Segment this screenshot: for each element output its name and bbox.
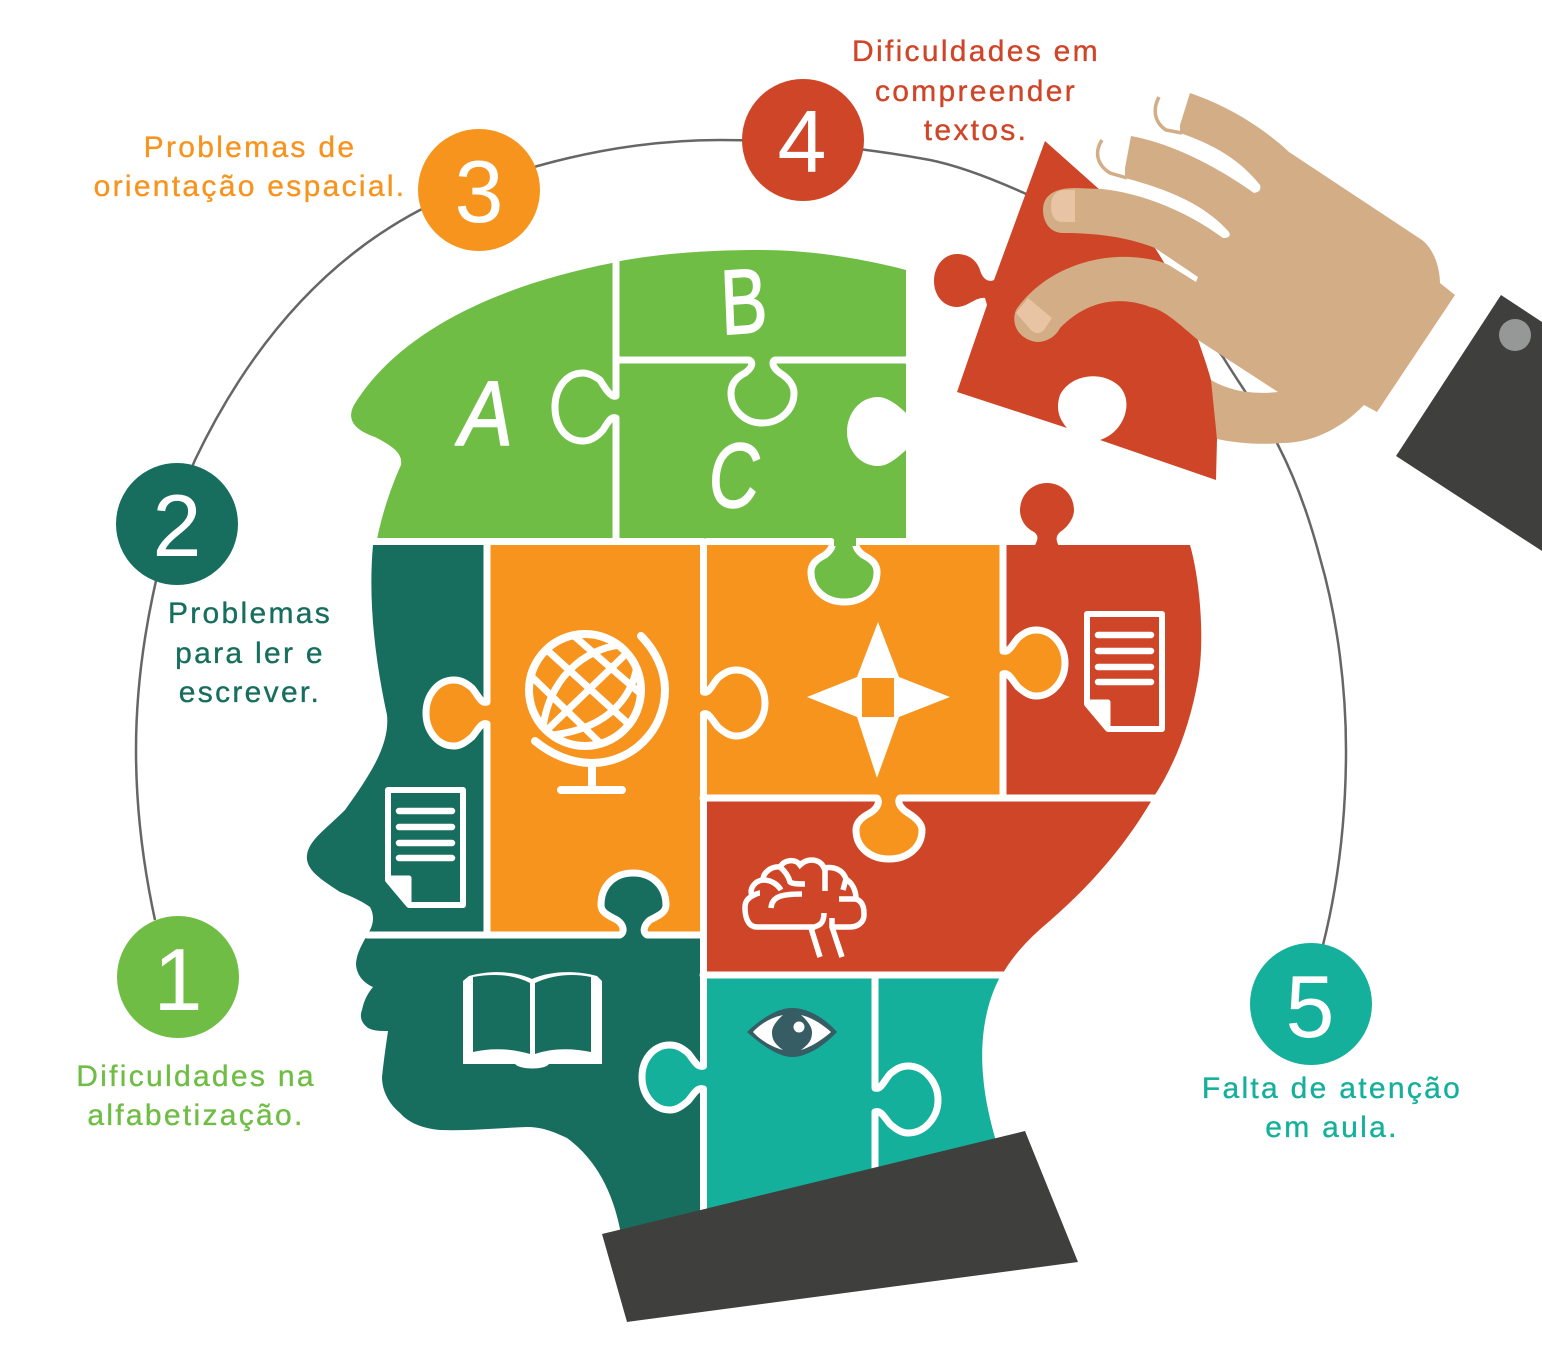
icon: globe [529, 634, 665, 790]
icon: open book [463, 972, 602, 1068]
icon: document dark teal [388, 790, 463, 905]
connecting arc [136, 140, 1346, 945]
label 4: compreender [875, 75, 1077, 108]
step 4 badge: 4 [778, 92, 826, 191]
fingernail outlines [1098, 97, 1182, 178]
step 2 badge: 2 [153, 476, 201, 575]
label 4: textos. [924, 114, 1028, 147]
piece: red lower [703, 798, 1153, 975]
label 3: orientação espacial. [94, 170, 406, 203]
step 1 badge: 1 [154, 930, 202, 1029]
icon: compass star [807, 622, 950, 778]
shirt cuff with button [1396, 295, 1542, 551]
puzzle head [307, 249, 1201, 1240]
step 1 badge [117, 916, 239, 1038]
label 5: Falta de atenção [1202, 1072, 1462, 1105]
piece: dark teal lower face [356, 935, 705, 1240]
letter C: C [709, 425, 760, 527]
label 2: Problemas [168, 597, 332, 630]
letter B: B [718, 249, 769, 355]
piece: dark teal upper face [307, 545, 490, 935]
piece outlines and knobs [367, 536, 1190, 1215]
step 4 badge [742, 79, 864, 201]
label 5 [1202, 1072, 1462, 1144]
step 2 badge [116, 463, 238, 585]
label 3: Problemas de [144, 131, 356, 164]
label 4 [852, 35, 1100, 147]
label 4: Dificuldades em [852, 35, 1100, 68]
label 3 [94, 131, 406, 203]
icon: document red [1087, 614, 1162, 729]
icon: brain [745, 860, 864, 957]
label 2: escrever. [179, 676, 321, 709]
piece: green top [351, 249, 906, 539]
icon: eye [747, 1008, 837, 1057]
piece: teal [703, 977, 1000, 1225]
label 1: alfabetização. [87, 1099, 305, 1132]
label 1 [76, 1060, 316, 1132]
step 3 badge [418, 129, 540, 251]
label 1: Dificuldades na [76, 1060, 316, 1093]
step 3 badge: 3 [455, 142, 503, 241]
label 2 [168, 597, 332, 709]
fingernail: thumb [1016, 298, 1052, 333]
piece: orange right [703, 545, 1003, 798]
knob: red top [1020, 483, 1074, 548]
label 5: em aula. [1265, 1111, 1399, 1144]
step 5 badge [1250, 943, 1372, 1065]
step 5 badge: 5 [1286, 957, 1334, 1056]
hand [1014, 93, 1455, 444]
loose red puzzle piece [934, 141, 1217, 480]
letter A: A [454, 363, 513, 465]
jacket sleeve [602, 1131, 1078, 1322]
piece: red upper right [1003, 545, 1201, 798]
label 2: para ler e [175, 637, 325, 670]
piece: orange left [487, 545, 703, 935]
fingernail: index [1051, 190, 1075, 222]
